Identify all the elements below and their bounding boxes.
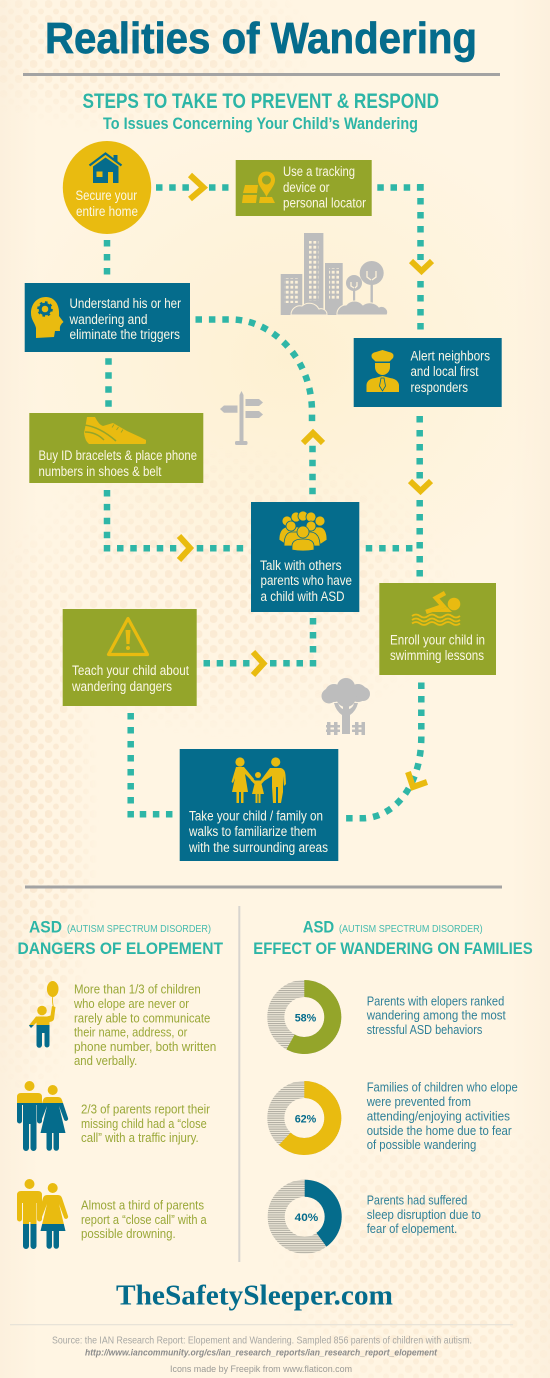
panel: family walks xyxy=(180,749,338,861)
text: 62: of possible wandering xyxy=(367,1137,476,1152)
text: alert xyxy=(410,348,490,395)
text: understand: wandering and xyxy=(69,312,148,327)
donut chart: 62%: 62% xyxy=(295,1114,317,1126)
stat: 58 percent xyxy=(276,980,506,1054)
text: talk xyxy=(260,558,352,604)
text: understand xyxy=(69,296,181,342)
heading: dangers of elopement: ASD xyxy=(29,918,62,937)
dotted path connectors xyxy=(104,184,424,818)
icon: group of people xyxy=(279,511,327,551)
text: bracelets: numbers in shoes & belt xyxy=(38,464,162,479)
title: Realities of Wandering xyxy=(45,14,477,63)
arrow: up xyxy=(303,433,323,443)
text: drowning: possible drowning. xyxy=(81,1226,176,1241)
text: communicate: who elope are never or xyxy=(73,996,190,1011)
text: 40: fear of elopement. xyxy=(367,1221,457,1236)
icon: shoe xyxy=(84,417,146,444)
icon: warning triangle xyxy=(108,618,148,654)
panel: teach dangers xyxy=(63,609,197,706)
icon: parents one third blue xyxy=(17,1179,68,1249)
icon: swimmer xyxy=(412,593,460,625)
icon: city xyxy=(281,233,388,315)
icon: map pin xyxy=(242,172,275,203)
icon: family xyxy=(232,757,286,803)
source credits: http://www.iancommunity.org/cs/ian_research_reports/ian_research_report_elopement xyxy=(85,1347,438,1358)
text: drowning: report a “close call” with a xyxy=(81,1212,207,1227)
text: teach xyxy=(71,663,189,694)
arrow: down 2 xyxy=(410,481,431,491)
text: tracking: Use a tracking xyxy=(283,164,355,179)
text: traffic: missing child had a “close xyxy=(81,1116,207,1131)
text: secure: entire home xyxy=(76,204,138,219)
text: communicate: and verbally. xyxy=(74,1053,137,1068)
text: secure xyxy=(76,188,138,219)
text: talk: parents who have xyxy=(260,573,352,588)
heading: effect on families: ASD xyxy=(303,918,334,937)
stat: 62 percent xyxy=(276,1080,518,1155)
icon: house xyxy=(90,154,122,183)
text: tracking: personal locator xyxy=(283,196,366,210)
text: talk: a child with ASD xyxy=(260,589,345,604)
text: bracelets: Buy ID bracelets & place phone xyxy=(38,448,197,463)
heading: steps: STEPS TO TAKE TO PREVENT & RESPOND xyxy=(82,89,439,113)
stat: 40 percent xyxy=(276,1180,481,1247)
heading: effect on families: (AUTISM SPECTRUM DISORDER) xyxy=(339,923,483,935)
text: tracking xyxy=(283,164,366,210)
text: 40: Parents had suffered xyxy=(367,1192,467,1207)
text: swim: swimming lessons xyxy=(390,648,484,663)
text: communicate: phone number, both written xyxy=(74,1039,216,1054)
donut chart: 58% xyxy=(276,980,341,1054)
text: talk: Talk with others xyxy=(260,558,342,573)
donut chart: 40%: 40% xyxy=(295,1212,319,1224)
text: 62: outside the home due to fear xyxy=(367,1123,512,1138)
donut chart: 62% xyxy=(276,1081,341,1155)
text: alert: and local first xyxy=(410,364,479,379)
source credits: Source: the IAN Research Report: Elopement and Wandering. Sampled 856 parents of children with autism. xyxy=(52,1335,472,1346)
text: bracelets xyxy=(38,448,197,479)
text: traffic xyxy=(81,1101,211,1145)
text: understand: Understand his or her xyxy=(70,296,181,311)
panel: tracking device xyxy=(236,160,372,216)
text: 62: attending/enjoying activities xyxy=(367,1108,510,1124)
arrow: right 3 xyxy=(253,652,264,675)
text: teach: Teach your child about xyxy=(72,663,189,678)
text: communicate xyxy=(73,981,216,1068)
text: 62: were prevented from xyxy=(366,1094,471,1109)
heading: steps xyxy=(82,89,439,133)
heading: dangers of elopement xyxy=(18,918,223,958)
text: swim: Enroll your child in xyxy=(390,632,485,647)
icon: child with balloon xyxy=(29,981,58,1048)
stat: drowning xyxy=(17,1179,207,1249)
text: 62: Families of children who elope xyxy=(367,1080,518,1095)
heading: steps: To Issues Concerning Your Child’s Wandering xyxy=(103,114,418,133)
text: family: walks to familiarize them xyxy=(188,824,316,839)
text: 58: Parents with elopers ranked xyxy=(367,993,504,1008)
text: teach: wandering dangers xyxy=(71,679,172,694)
panel: understand triggers xyxy=(25,283,190,352)
stat: communicate xyxy=(29,981,216,1068)
text: drowning: Almost a third of parents xyxy=(81,1197,204,1212)
text: communicate: rarely able to communicate xyxy=(74,1010,210,1026)
text: understand: eliminate the triggers xyxy=(70,327,180,342)
text: 58 xyxy=(366,993,506,1037)
panel: swimming lessons xyxy=(379,583,496,675)
panel: ID bracelets xyxy=(29,413,203,483)
heading: dangers of elopement: (AUTISM SPECTRUM DISORDER) xyxy=(67,923,211,935)
donut chart: 58%: 58% xyxy=(295,1013,317,1025)
text: family: Take your child / family on xyxy=(189,809,323,824)
text: family xyxy=(188,809,328,855)
arrow: down 1 xyxy=(411,261,432,271)
text: 40 xyxy=(367,1192,481,1236)
text: traffic: call” with a traffic injury. xyxy=(81,1130,199,1145)
heading: effect on families xyxy=(253,918,533,958)
website name: TheSafetySleeper.com xyxy=(116,1279,393,1311)
text: alert: responders xyxy=(410,380,468,395)
panel: talk with parents xyxy=(251,502,359,612)
text: swim xyxy=(390,632,485,663)
stat: traffic injury xyxy=(17,1081,211,1151)
panel: secure home xyxy=(63,141,151,234)
icon: parents two thirds blue xyxy=(17,1081,68,1151)
arrow: corner xyxy=(408,772,427,787)
text: communicate: More than 1/3 of children xyxy=(74,981,201,996)
icon: signpost xyxy=(220,391,263,445)
arrow: right 2 xyxy=(179,536,190,560)
text: 40: sleep disruption due to xyxy=(367,1207,481,1222)
text: traffic: 2/3 of parents report their xyxy=(81,1101,211,1116)
text: communicate: their name, address, or xyxy=(74,1024,188,1040)
text: drowning xyxy=(81,1197,207,1241)
text: secure: Secure your xyxy=(76,188,137,203)
icon: officer xyxy=(366,350,399,392)
text: family: with the surrounding areas xyxy=(188,840,328,855)
text: 58: stressful ASD behaviors xyxy=(367,1022,483,1037)
donut chart: 40% xyxy=(276,1180,342,1247)
source credits: Icons made by Freepik from www.flaticon.com xyxy=(170,1364,352,1375)
source credits xyxy=(52,1335,472,1375)
text: 58: wandering among the most xyxy=(366,1008,506,1023)
text: 62 xyxy=(366,1080,518,1152)
icon: tree and fence xyxy=(322,678,370,735)
heading: dangers of elopement: DANGERS OF ELOPEMENT xyxy=(18,940,223,958)
panel: alert neighbors xyxy=(354,338,502,407)
icon: head with gear xyxy=(31,297,64,338)
arrow: right 1 xyxy=(190,175,204,199)
text: tracking: device or xyxy=(283,180,330,195)
text: alert: Alert neighbors xyxy=(410,348,490,364)
